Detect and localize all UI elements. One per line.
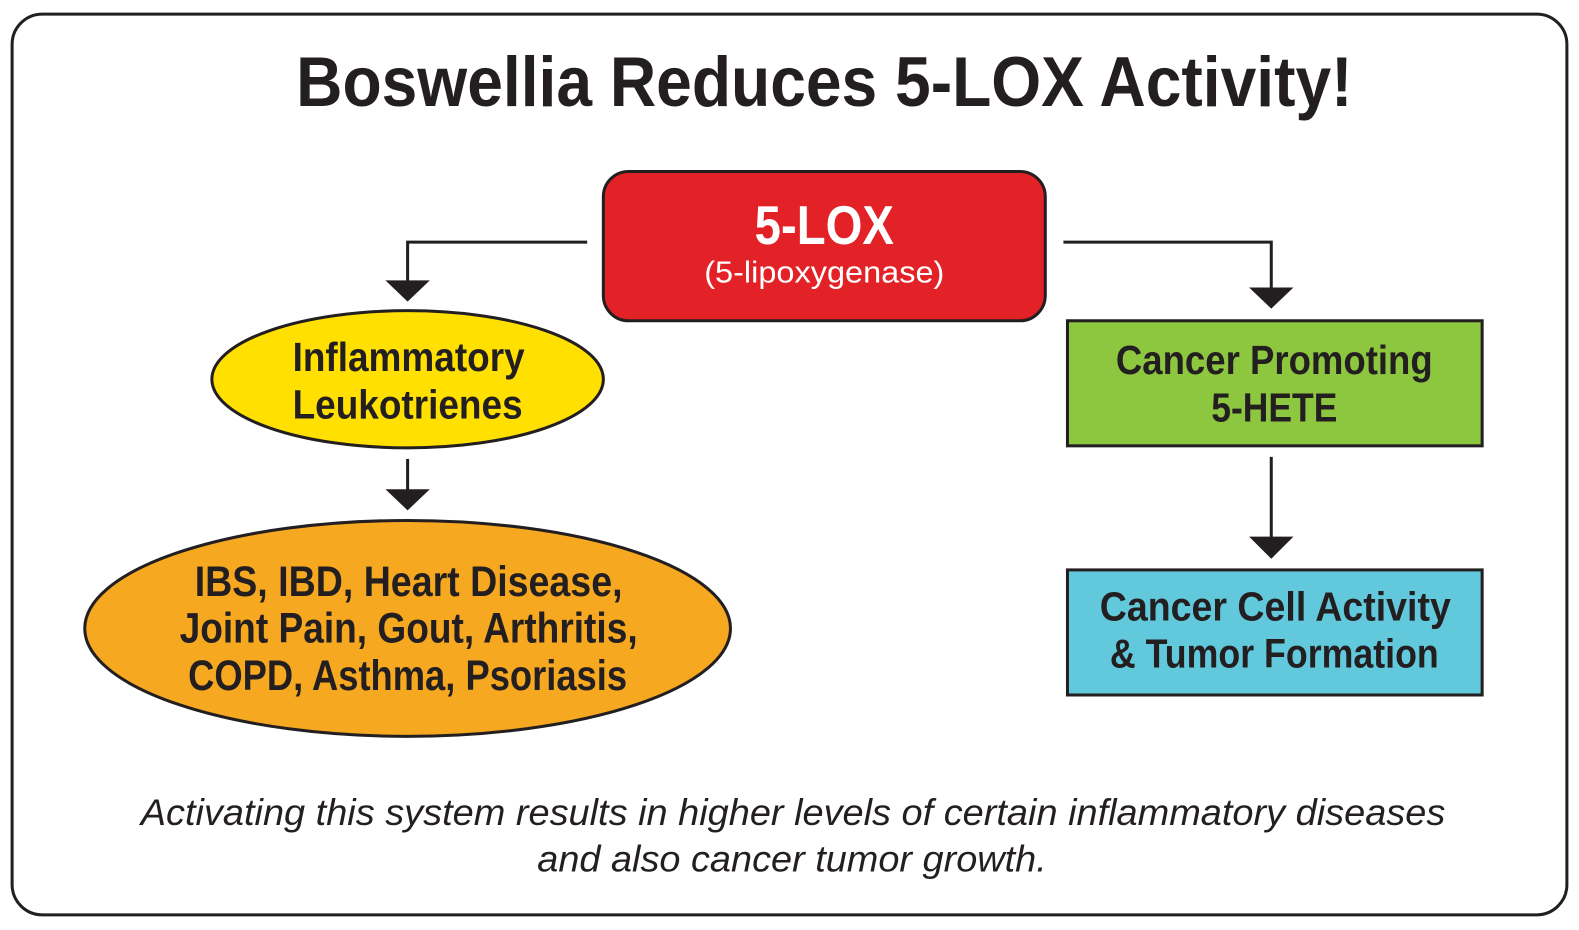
- panel: cancer cell activity: [1067, 570, 1482, 695]
- panel: inflammatory leukotrienes: Inflammatory: [293, 334, 525, 380]
- panel: 5-LOX box: [603, 171, 1045, 321]
- panel: inflammatory leukotrienes: Leukotrienes: [293, 382, 523, 428]
- 5-LOX heading: 5-LOX: [755, 195, 894, 256]
- panel: diseases: COPD, Asthma, Psoriasis: [188, 652, 627, 699]
- arrow: to tumor: [1249, 457, 1293, 559]
- panel: cancer promoting 5-HETE: Cancer Promoting: [1116, 337, 1433, 383]
- footer caption: [139, 791, 1445, 879]
- arrow: to leukotrienes: [385, 242, 587, 302]
- arrow: to 5-HETE: [1063, 242, 1293, 309]
- footer caption: Activating this system results in higher levels of certain inflammatory diseases: [139, 791, 1445, 833]
- title: Boswellia Reduces 5-LOX Activity!: [296, 42, 1352, 121]
- panel: cancer promoting 5-HETE: 5-HETE: [1211, 385, 1337, 431]
- panel: cancer promoting 5-HETE: [1067, 321, 1482, 446]
- footer caption: and also cancer tumor growth.: [537, 838, 1047, 879]
- panel: diseases: IBS, IBD, Heart Disease,: [195, 558, 623, 605]
- panel: diseases: [85, 520, 730, 736]
- subtitle: (5-lipoxygenase): [704, 256, 944, 289]
- panel: inflammatory leukotrienes: [212, 311, 603, 448]
- arrow: to diseases: [385, 459, 430, 510]
- panel: diseases: Joint Pain, Gout, Arthritis,: [180, 605, 638, 652]
- panel: cancer cell activity: Cancer Cell Activity: [1100, 583, 1451, 629]
- panel: cancer cell activity: & Tumor Formation: [1110, 631, 1439, 677]
